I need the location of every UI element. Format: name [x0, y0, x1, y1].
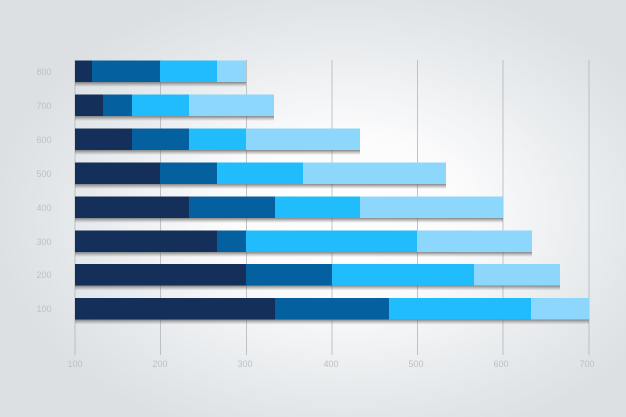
y axis labels: 800	[36, 67, 52, 77]
y axis labels: 500	[36, 169, 52, 179]
stacked bar: 700	[75, 94, 274, 121]
x axis labels: 500	[408, 359, 424, 369]
y axis labels: 400	[36, 203, 52, 213]
y axis labels: 100	[36, 304, 52, 314]
stacked bar: 100	[75, 298, 589, 324]
x axis labels: 400	[323, 359, 339, 369]
grid lines	[75, 60, 589, 355]
stacked bar: 600	[75, 128, 360, 155]
x axis labels: 600	[493, 359, 509, 369]
y axis labels: 600	[36, 135, 52, 145]
y axis labels: 300	[36, 237, 52, 247]
x axis labels: 700	[579, 359, 595, 369]
stacked bar: 400	[75, 196, 503, 223]
x axis labels: 100	[67, 359, 83, 369]
y axis labels	[36, 67, 52, 314]
stacked bar: 200	[75, 264, 560, 290]
stacked bar: 300	[75, 230, 532, 257]
x axis labels: 300	[237, 359, 253, 369]
y axis labels: 200	[36, 270, 52, 280]
stacked bar: 800	[75, 60, 246, 87]
y axis labels: 700	[36, 101, 52, 111]
x axis labels	[67, 359, 595, 369]
x axis labels: 200	[152, 359, 168, 369]
stacked bar: 500	[75, 162, 446, 189]
